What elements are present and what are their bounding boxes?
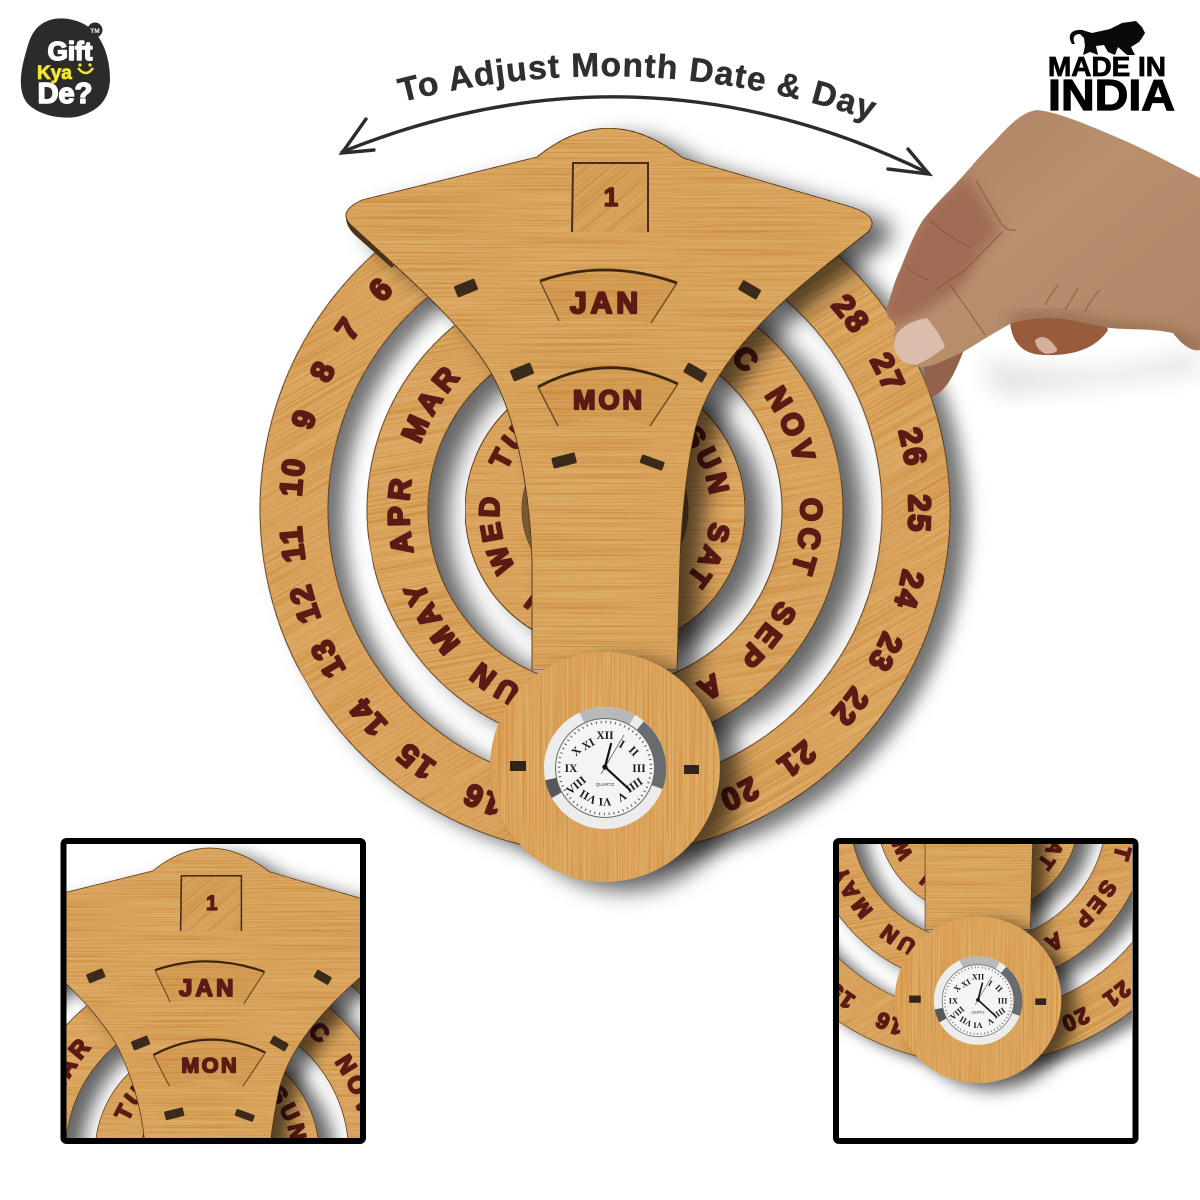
date numbers: 25 (907, 494, 932, 532)
inset: clock close-up: THU (914, 866, 971, 907)
inset: clock close-up: VII (958, 1014, 974, 1028)
inset: clock close-up: XI (960, 977, 972, 990)
inset: clock close-up: V (985, 1016, 995, 1027)
inset: top window close-up: MAR (66, 1039, 92, 1086)
arrow: curved double-headed (342, 97, 929, 174)
date numbers: 26 (898, 427, 928, 466)
inset: top window close-up: DEC (310, 1023, 330, 1042)
date numbers: 24 (894, 568, 924, 608)
inset: clock close-up: VI (973, 1020, 983, 1029)
window: date: 1 (604, 182, 618, 212)
inset: top window close-up: SUN (276, 1086, 307, 1138)
badge: Made in India (1048, 21, 1175, 120)
text: Made in: MADE IN (1048, 51, 1166, 82)
window: weekday: MON (573, 385, 645, 415)
window: month (540, 270, 677, 323)
date numbers: 23 (869, 630, 902, 672)
clock: disc and dial: V (614, 789, 628, 804)
clock: disc and dial: VI (598, 795, 611, 807)
inset: clock close-up: X (952, 983, 963, 994)
date numbers: 10 (279, 458, 306, 496)
clock: disc and dial (490, 652, 720, 882)
clock bezel (544, 707, 666, 829)
inset: clock close-up: III (998, 996, 1008, 1005)
date numbers: 8 (310, 361, 335, 382)
ring: months (366, 316, 880, 751)
date numbers: 22 (830, 685, 868, 726)
inset: clock close-up (833, 838, 1138, 1144)
ring: dates (259, 247, 980, 872)
window: month: JAN (570, 287, 642, 320)
ring: months: OCT (792, 498, 824, 577)
ring: months: JUN (468, 662, 518, 706)
inset: clock close-up: 14 (787, 944, 825, 982)
thumbnail (894, 318, 945, 365)
clock: disc and dial: IX (565, 763, 578, 775)
date numbers: 13 (311, 639, 346, 678)
logo: Gift Kya De: Gift (48, 36, 93, 66)
inset: clock close-up: MAY (826, 860, 877, 923)
inset: top window close-up: JAN (179, 975, 237, 1002)
inset: top window close-up: MON (181, 1053, 239, 1078)
date numbers: 28 (830, 294, 869, 333)
hand shading (880, 175, 1200, 348)
inset: top window close-up (60, 838, 366, 1144)
clock: disc and dial: X (570, 744, 584, 759)
inset: clock close-up: JUN (873, 917, 934, 967)
ring: months: NOV (764, 384, 816, 458)
clock: disc and dial: IIII (624, 775, 646, 796)
text: India: INDIA (1048, 71, 1175, 120)
icon: hand turning the ring (880, 110, 1200, 397)
logo: Gift Kya De (21, 18, 110, 118)
inset: top window close-up: NOV (334, 1053, 360, 1111)
inset: clock close-up: SEP (1068, 876, 1122, 935)
date numbers: 9 (292, 410, 316, 430)
date numbers: 15 (395, 744, 437, 778)
logo: Gift Kya De: De? (38, 78, 92, 110)
inset: clock close-up: SAT (1031, 821, 1071, 875)
main hand (887, 110, 1200, 367)
clock: disc and dial: XII (596, 730, 614, 742)
inset: clock close-up: I (986, 979, 994, 988)
ring: weekdays: SAT (689, 522, 730, 590)
date numbers: 14 (348, 698, 388, 736)
ring: weekdays: TUE (488, 424, 518, 466)
date numbers: 12 (290, 584, 322, 624)
ring: weekdays: THU (523, 595, 532, 610)
ring: weekdays: SUN (692, 426, 730, 494)
clock: disc and dial: I (617, 739, 627, 751)
ring: weekdays (465, 393, 781, 662)
clock: disc and dial: XI (580, 736, 597, 753)
inset: clock close-up: IX (949, 996, 958, 1005)
inset: clock close-up: VIII (948, 1005, 966, 1022)
clock face (556, 718, 654, 818)
window: weekday (538, 368, 678, 426)
inset: clock close-up: 20 (1057, 1002, 1093, 1037)
inset: clock close-up: 21 (1098, 976, 1136, 1013)
inset: clock close-up: 16 (871, 1006, 907, 1040)
ring: weekdays: WED (478, 497, 514, 578)
icon: lion (1070, 21, 1145, 55)
inset: clock close-up: 15 (822, 977, 859, 1014)
ring: months: MAY (402, 587, 461, 656)
clock: disc and dial: VIII (564, 774, 589, 797)
inset: clock close-up: WED (884, 801, 917, 863)
heading: curved instruction: To Adjust Month Date & Day (396, 52, 877, 124)
date numbers: 6 (370, 278, 392, 301)
ring: months: SEP (744, 602, 796, 668)
inset: clock close-up: QUARTZ (971, 1011, 985, 1015)
date numbers: 7 (333, 316, 358, 340)
plate: top bracket and stem (346, 128, 872, 670)
logo: Gift Kya De: Kya (37, 63, 72, 84)
date numbers: 27 (868, 352, 906, 386)
date numbers: 21 (775, 738, 816, 777)
inset: clock close-up: XII (972, 973, 984, 982)
date numbers: 16 (464, 784, 498, 816)
inset: clock close-up: OCT (1108, 805, 1140, 866)
product: wooden calendar clock (259, 121, 980, 907)
date numbers (279, 278, 932, 816)
inset: clock close-up: II (993, 983, 1004, 994)
back finger (1010, 305, 1108, 355)
clock: disc and dial: III (632, 763, 646, 775)
ring: months: MAR (400, 367, 461, 444)
inset: top window close-up: TUE (113, 1084, 138, 1118)
slots: dark tabs (454, 278, 762, 471)
index finger below thumb (924, 350, 964, 397)
ring: months: AUG (689, 672, 719, 699)
clock: disc and dial: QUARTZ (596, 782, 614, 787)
date numbers: 20 (721, 776, 760, 810)
clock: disc and dial: VII (578, 786, 599, 806)
window: date (571, 162, 649, 232)
inset: clock close-up: IIII (991, 1006, 1007, 1021)
inset: clock close-up: AUG (1002, 927, 1067, 973)
inset: top window close-up: 1 (206, 892, 218, 915)
ring: months: APR (387, 478, 414, 554)
clock: disc and dial: II (626, 744, 641, 759)
ring: months: DEC (734, 347, 758, 372)
date numbers: 11 (279, 526, 306, 562)
creases (905, 180, 1100, 335)
logo: Gift Kya De: TM (90, 28, 100, 35)
